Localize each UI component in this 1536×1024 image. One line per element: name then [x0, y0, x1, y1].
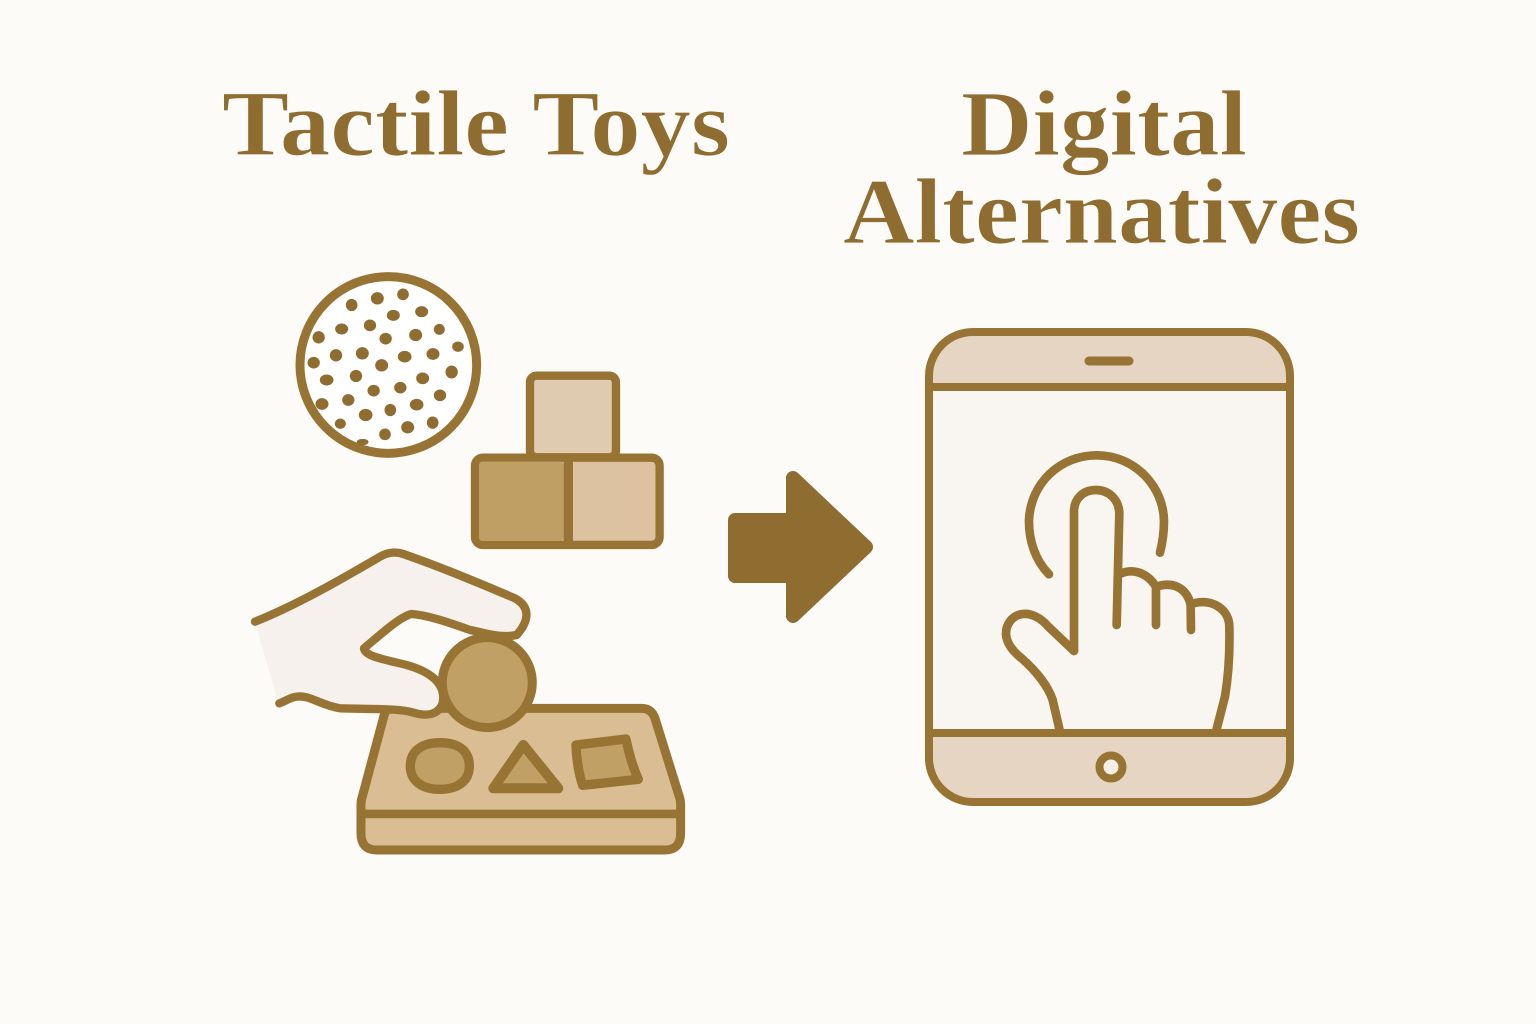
hand outline: [255, 552, 526, 635]
icon: shape sorter board: [361, 708, 681, 850]
icon: textured ball: [300, 277, 477, 453]
title: Digital Alternatives: Digital: [961, 73, 1247, 176]
icon: tablet: [929, 332, 1290, 802]
icon: stacked blocks: [475, 376, 660, 545]
speaker: [1089, 356, 1129, 366]
arrow: [735, 478, 866, 616]
hand fill: [255, 552, 526, 714]
title: Tactile Toys: Tactile Toys: [222, 73, 730, 176]
icon: square slot: [576, 739, 638, 785]
icon: circle slot: [410, 743, 469, 789]
icon: triangle slot: [493, 745, 558, 788]
icon: hand holding ball: [255, 552, 532, 728]
title: Digital Alternatives: [843, 73, 1360, 264]
ball: [442, 638, 532, 728]
title: Digital Alternatives: Alternatives: [843, 161, 1360, 264]
home button: [1100, 756, 1122, 778]
icon: tapping finger: [1006, 455, 1229, 732]
